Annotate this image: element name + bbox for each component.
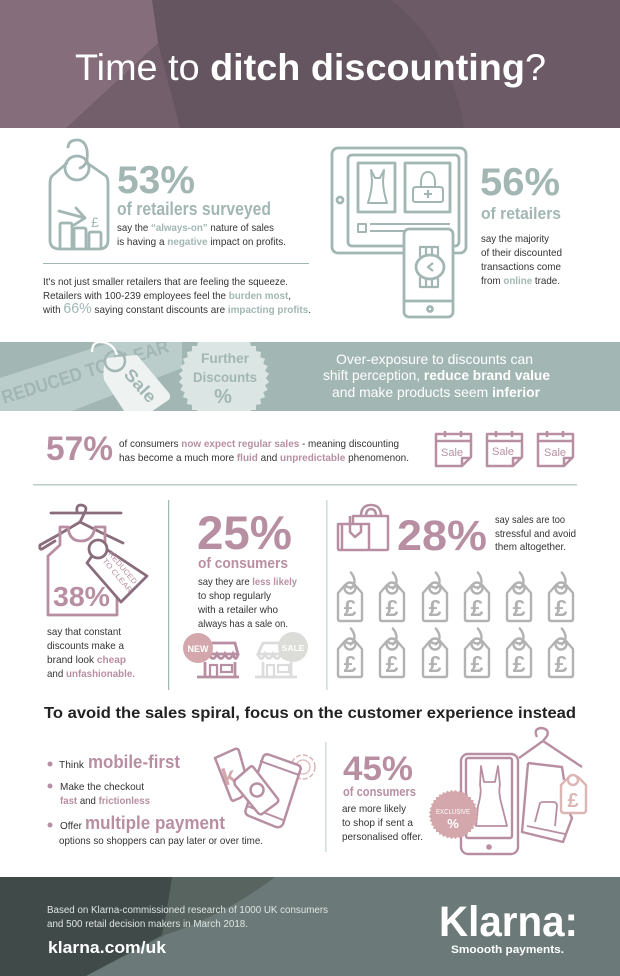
stat: 57%: 57%	[46, 430, 113, 468]
body text: say they are less likely	[198, 576, 297, 588]
panel: 25%: to shop regularly	[198, 590, 272, 602]
icon grid: pound price tags: £	[344, 651, 357, 677]
badge: exclusive: %	[447, 816, 459, 831]
source note: and 500 retail decision makers in March 2018.	[47, 919, 248, 930]
icon grid: pound price tags: £	[513, 651, 526, 677]
subheading: of retailers surveyed	[117, 199, 271, 219]
text block: smaller retailers: Retailers with 100-239 employees feel the burden most,	[43, 290, 291, 302]
icon: new store	[183, 633, 239, 677]
tip: mobile-first: Think	[59, 759, 85, 771]
tip: checkout	[48, 781, 150, 807]
tip: multiple payment: Offer	[60, 820, 82, 832]
body text: say the majority	[481, 233, 550, 245]
subheading: of consumers	[343, 784, 416, 799]
panel: 38%	[40, 505, 147, 680]
panel: 57% of consumers	[46, 430, 573, 468]
panel: 56% of retailers: transactions come	[481, 261, 561, 273]
logo: Klarna: Klarna:	[439, 898, 578, 946]
banner text: shift perception, reduce brand value	[323, 367, 550, 383]
url: klarna.com/uk	[48, 938, 167, 957]
icon: sale calendars: Sale	[544, 447, 566, 459]
icon grid: pound price tags: £	[471, 595, 484, 621]
panel: 56% of retailers: from online trade.	[481, 275, 560, 287]
starburst: further discounts: Further	[201, 350, 250, 366]
panel: 38%: brand look cheap	[47, 654, 126, 666]
header banner	[0, 0, 620, 128]
icon: sale tag: Sale	[120, 365, 160, 407]
panel: 45% of consumers	[342, 728, 586, 854]
panel: 53% of retailers	[50, 140, 286, 249]
icon grid: pound price tags: £	[386, 595, 399, 621]
starburst: further discounts: Discounts	[193, 369, 257, 385]
icon grid: pound price tags	[338, 572, 573, 677]
banner: over-exposure	[0, 342, 620, 411]
text block: smaller retailers: with 66% saying constant discounts are impacting profits.	[42, 300, 311, 317]
icon: sale store	[255, 632, 308, 677]
tip: mobile-first: mobile-first	[88, 752, 180, 772]
icon: price tag with falling bars: £	[91, 214, 99, 230]
panel: 25%: always has a sale on.	[198, 618, 288, 630]
panel: 25%: with a retailer who	[197, 604, 278, 616]
panel: 53% of retailers: is having a negative impact on profits.	[117, 236, 286, 248]
text block: smaller retailers	[42, 276, 311, 317]
starburst: further discounts: %	[214, 386, 232, 408]
icon: new store: NEW	[188, 644, 209, 654]
stat: 53%: 53%	[117, 159, 195, 202]
panel: 28%: stressful and avoid	[495, 528, 576, 540]
icon grid: pound price tags: £	[429, 595, 442, 621]
tip: multiple payment: multiple payment	[85, 813, 225, 833]
icon: tank top on hanger with tag	[40, 505, 147, 615]
panel: 57% of consumers: has become a much more fluid and unpredictable phenomenon.	[119, 452, 409, 464]
stat: 56%: 56%	[480, 161, 560, 204]
icon: tablet and phone	[332, 148, 466, 317]
panel: 28%: them altogether.	[495, 541, 566, 553]
stat: 45%: 45%	[343, 750, 413, 788]
tip: mobile-first	[48, 752, 180, 772]
banner text	[323, 351, 550, 400]
panel: 45% of consumers: to shop if sent a	[342, 817, 413, 829]
icon grid: pound price tags: £	[555, 651, 568, 677]
icon: sale store: SALE	[282, 643, 305, 653]
panel: 38%: and unfashionable.	[47, 668, 135, 680]
badge: exclusive	[429, 790, 478, 839]
icon: tank top on hanger with tag: TO CLEAR	[100, 557, 135, 595]
icon: price tag with falling bars	[50, 140, 108, 249]
body text: of consumers now expect regular sales - meaning discounting	[119, 438, 399, 450]
body text: say sales are too	[495, 514, 565, 526]
icon: shopping bags	[338, 505, 388, 550]
icon: phones, card and gear	[215, 749, 315, 827]
body text: say that constant	[47, 626, 121, 638]
tagline: Smoooth payments.	[451, 944, 564, 956]
icon grid: pound price tags: £	[555, 595, 568, 621]
icon: sale calendars: Sale	[492, 446, 514, 458]
panel: 45% of consumers: personalised offer.	[342, 831, 423, 843]
footer	[0, 877, 620, 976]
starburst: further discounts	[179, 342, 269, 411]
banner text: and make products seem inferior	[332, 384, 541, 400]
stat: 28%: 28%	[397, 512, 487, 560]
icon: sale calendars	[436, 431, 573, 466]
icon: phone with dress and garment on hanger	[461, 728, 586, 854]
icon grid: pound price tags: £	[471, 651, 484, 677]
stat: 38%: 38%	[53, 581, 110, 612]
reduced to clear band: REDUCED TO CLEAR	[0, 336, 172, 409]
badge: exclusive: EXCLUSIVE	[436, 809, 470, 816]
tip: checkout: fast and frictionless	[60, 795, 150, 807]
subheading: of consumers	[198, 555, 288, 572]
source note: Based on Klarna-commissioned research of 1000 UK consumers	[47, 905, 328, 916]
tip: checkout: Make the checkout	[60, 781, 144, 793]
icon grid: pound price tags: £	[513, 595, 526, 621]
panel: 28%	[338, 505, 576, 677]
panel: 25%	[183, 506, 308, 677]
icon: phone with dress and garment on hanger: £	[567, 790, 579, 812]
heading: customer experience: To avoid the sales spiral, focus on the customer experience instead	[44, 705, 576, 722]
tip: multiple payment: options so shoppers can pay later or over time.	[59, 835, 263, 847]
panel: 38%: discounts make a	[47, 640, 124, 652]
icon grid: pound price tags: £	[344, 595, 357, 621]
icon grid: pound price tags: £	[386, 651, 399, 677]
icon: phones, card and gear: k	[219, 762, 240, 792]
panel: 56% of retailers	[332, 148, 562, 317]
title: Time to ditch discounting?	[75, 47, 546, 88]
source note	[47, 905, 328, 930]
body text: say the “always-on” nature of sales	[117, 222, 274, 234]
tip: multiple payment	[48, 813, 263, 847]
icon: sale tag	[92, 342, 170, 414]
body text: are more likely	[342, 803, 407, 815]
stat: 25%: 25%	[197, 506, 292, 559]
banner text: Over-exposure to discounts can	[336, 351, 533, 367]
text block: smaller retailers: It's not just smaller retailers that are feeling the squeeze.	[43, 276, 288, 288]
panel: tips list	[48, 749, 315, 847]
icon: sale calendars: Sale	[441, 447, 463, 459]
subheading: of retailers	[481, 204, 561, 223]
icon: tank top on hanger with tag: REDUCED	[106, 550, 139, 586]
icon grid: pound price tags: £	[429, 651, 442, 677]
panel: 56% of retailers: of their discounted	[481, 247, 562, 259]
